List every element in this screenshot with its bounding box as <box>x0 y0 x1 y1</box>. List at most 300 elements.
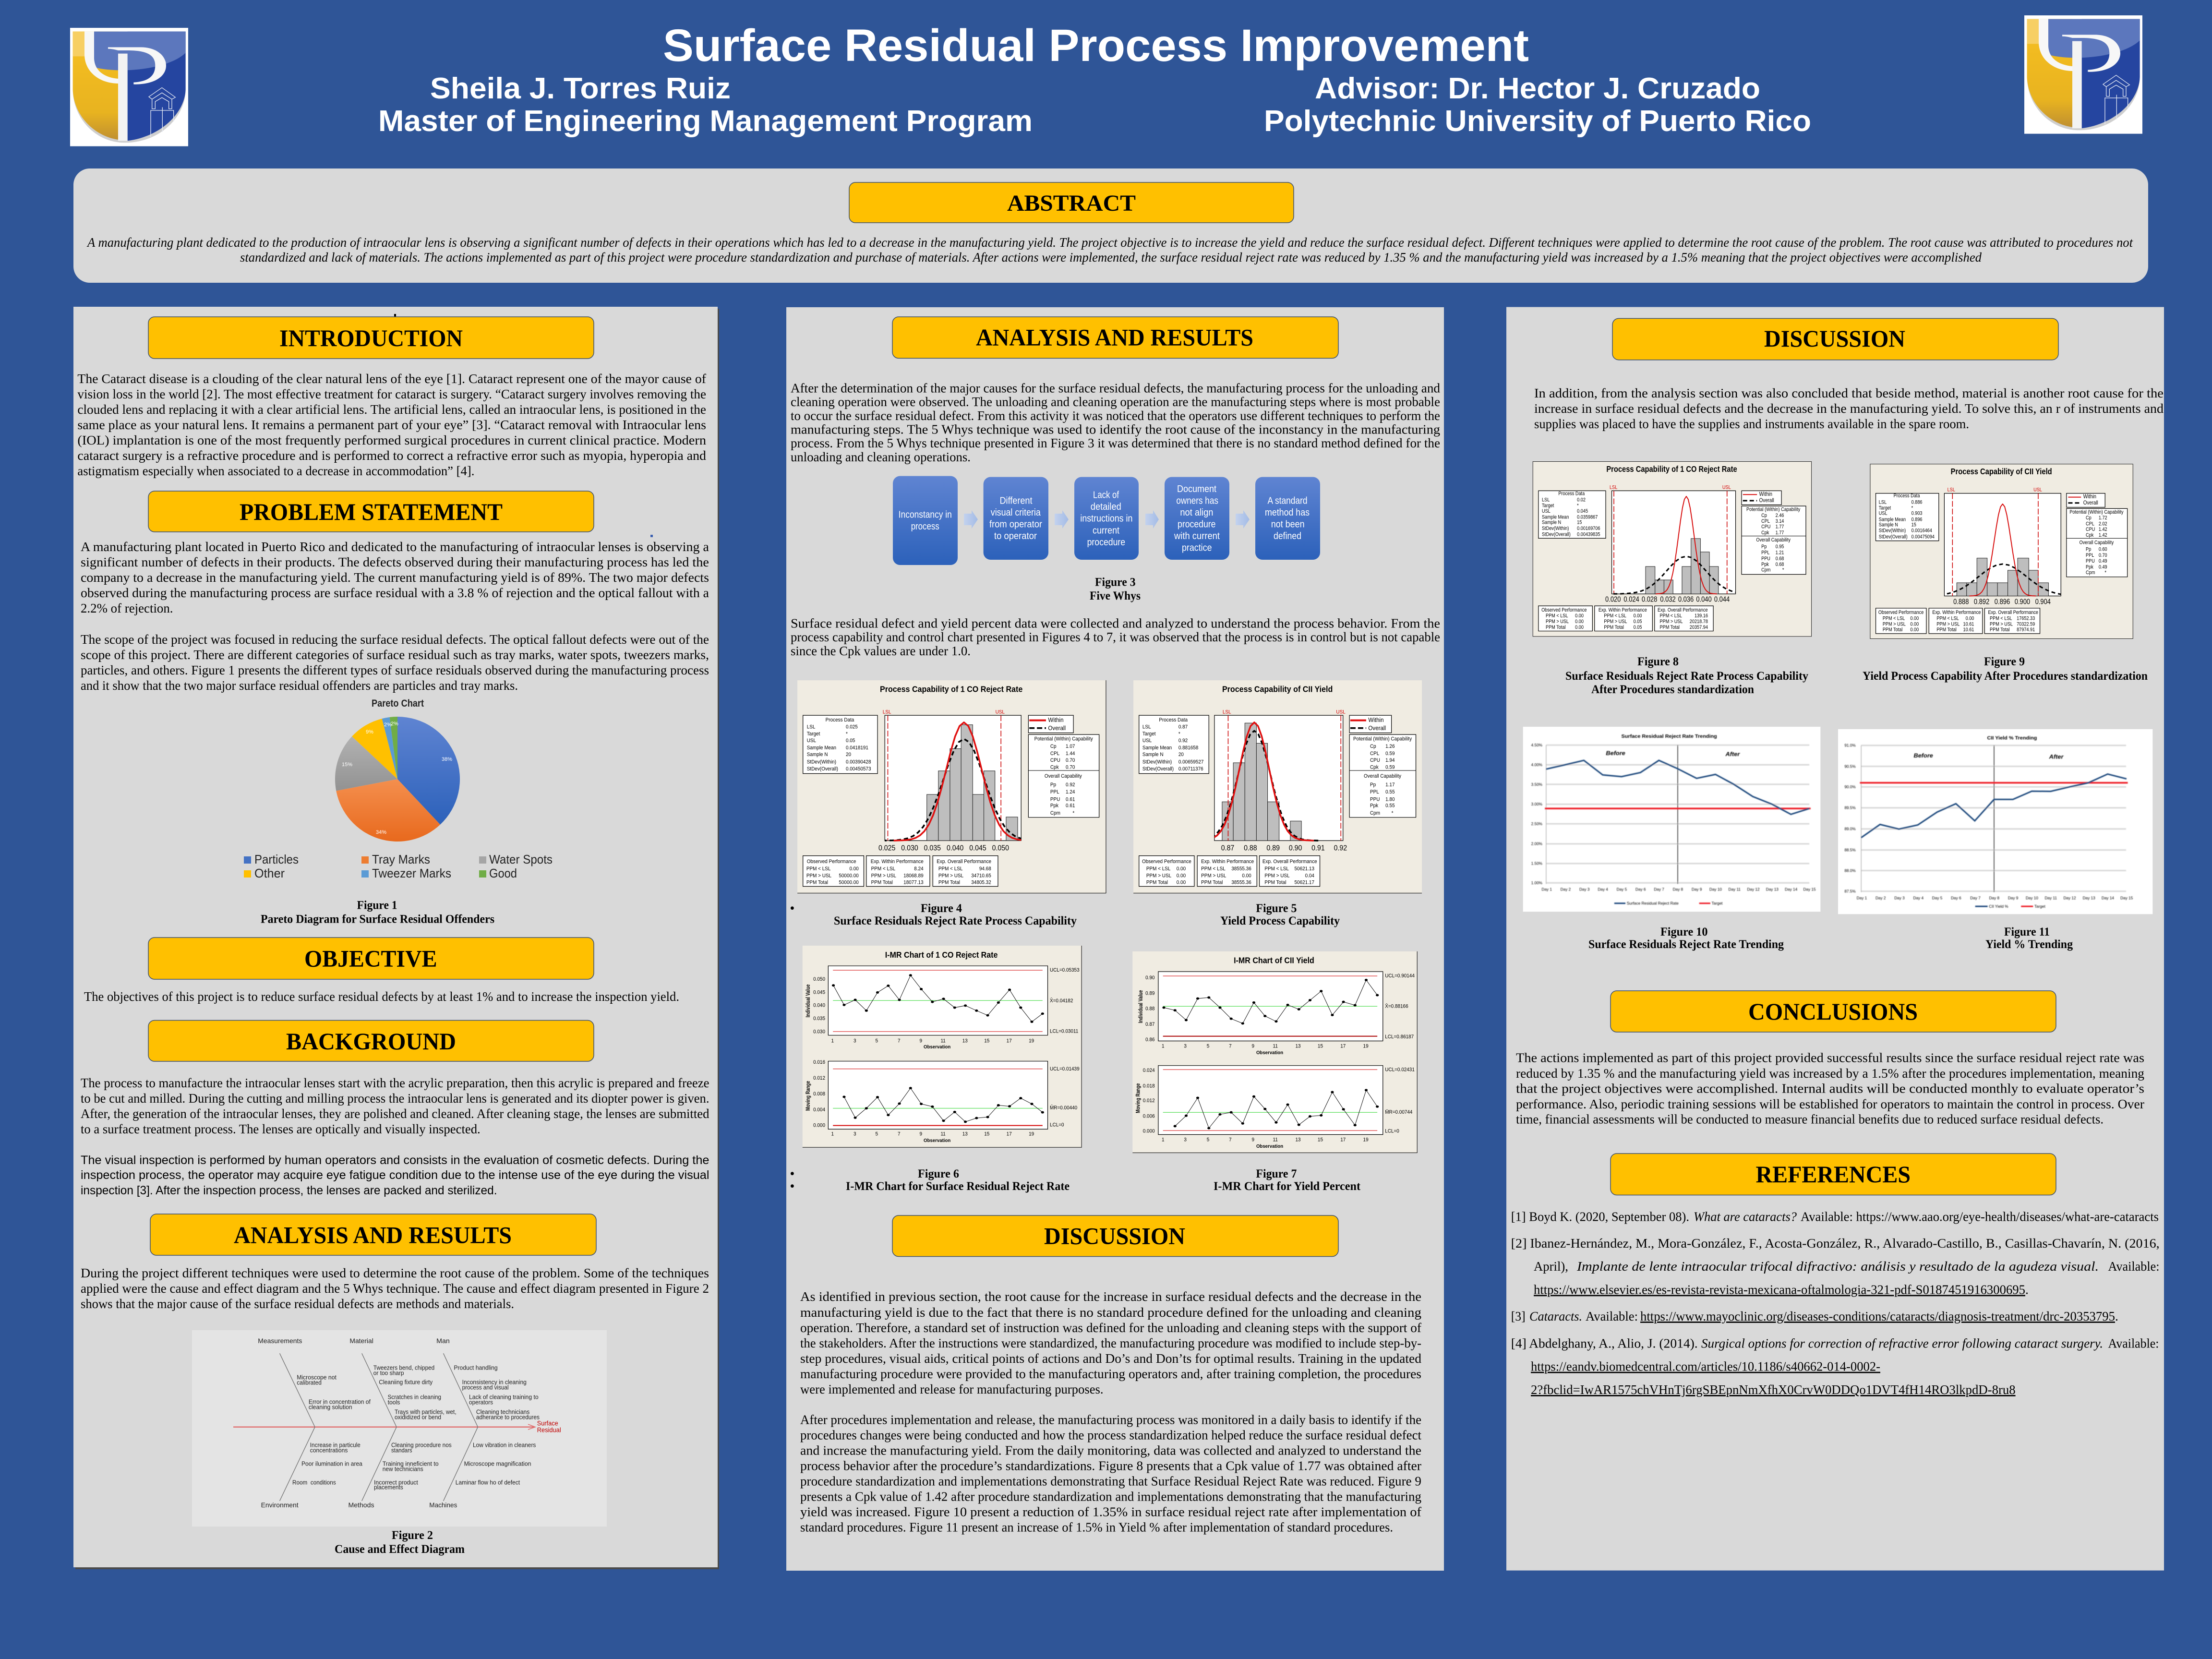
chart: figure 7 I-MR chart: 15 <box>1318 1137 1323 1143</box>
chart: figure 9 process capability: 1.72 <box>2099 516 2107 521</box>
caption: figure 3: Figure 3 <box>1095 576 1136 589</box>
diagram: cause and effect fishbone: Surface <box>537 1419 558 1427</box>
text: discussion: As identified in previous section, the root cause for the increase in surface residual defects and the decrease in the <box>800 1289 1421 1304</box>
text: conclusions <box>1516 1050 2144 1126</box>
step 3 box: current <box>1093 526 1119 536</box>
chart: figure 6 I-MR chart: 19 <box>1029 1131 1034 1137</box>
heading: introduction: INTRODUCTION <box>279 325 463 351</box>
abstract text: standardized and lack of materials. The actions implemented as part of this project were procedure standardization and purchase of materials. After actions were implemented, the surface residual reject rate was reduced by 1.35 % and the manufacturing yield was increased by a 1.5% meaning that the project objectives were accomplished <box>240 250 1982 264</box>
author block <box>378 72 1811 138</box>
pie chart: pareto chart: 2% <box>391 721 398 727</box>
chart: figure 9 process capability <box>1870 464 2133 638</box>
text: objective: The objectives of this project is to reduce surface residual defects by at least 1% and to increase the inspection yield. <box>84 989 679 1004</box>
text: references: Available: https://www.aao.org/eye-health/diseases/what-are-cataracts <box>1801 1209 2159 1224</box>
chart: figure 5 process capability: Sample N <box>1142 752 1164 757</box>
chart: figure 6 I-MR chart: Observation <box>924 1045 950 1050</box>
captions: figures 8 and 9: Yield Process Capability After Procedures standardization <box>1863 670 2148 683</box>
panel: left column <box>73 307 719 1569</box>
text: references: What are cataracts? <box>1694 1209 1797 1224</box>
step 4 box: practice <box>1182 542 1212 553</box>
diagram: cause and effect fishbone: Microscope not <box>297 1374 337 1381</box>
step 2 box: visual criteria <box>991 507 1041 518</box>
chart: figure 8 process capability: 0.040 <box>1696 596 1712 604</box>
step 5 box: A standard <box>1267 495 1308 506</box>
chart: figure 9 process capability: USL <box>1879 511 1887 517</box>
chart: figure 8 process capability: Process Capability of 1 CO Reject Rate <box>1606 465 1737 474</box>
chart: figure 10 reject rate trend: Target <box>1712 902 1723 906</box>
chart: figure 11 yield trend: Target <box>2034 904 2046 909</box>
chart: figure 7 I-MR chart: 11 <box>1273 1044 1278 1049</box>
chart: figure 9 process capability: Potential (Within) Capability <box>2069 509 2123 515</box>
chart: figure 5 process capability: 0.92 <box>1334 844 1347 853</box>
step 2 box: Different <box>999 495 1033 506</box>
chart: figure 11 yield trend: 90.5% <box>1844 764 1856 769</box>
chart: figure 9 process capability: Overall <box>2083 500 2098 506</box>
chart: figure 8 process capability: PPM > USL <box>1604 619 1627 625</box>
chart: figure 7 I-MR chart: 0.90 <box>1145 975 1155 981</box>
chart: figure 6 I-MR chart: 3 <box>854 1131 856 1137</box>
heading: analysis and results (left): ANALYSIS AND RESULTS <box>234 1221 512 1248</box>
chart: figure 6 I-MR chart: Observation <box>924 1138 950 1143</box>
author block: Advisor: Dr. Hector J. Cruzado <box>1315 72 1760 105</box>
text: background: inspection [3]. After the inspection process, the lenses are packed and sterilized. <box>81 1184 497 1197</box>
chart: figure 5 process capability: PPM > USL <box>1264 873 1290 879</box>
chart: figure 7 I-MR chart: 17 <box>1340 1137 1346 1143</box>
diagram: cause and effect fishbone: Cleaniing fixture dirty <box>379 1379 433 1385</box>
chart: figure 4 process capability: USL <box>996 709 1005 715</box>
chart: figure 8 process capability: 0.95 <box>1776 544 1784 550</box>
chart: figure 9 process capability: Ppk <box>2086 565 2094 570</box>
chart: figure 4 process capability: 0.045 <box>969 844 986 853</box>
text: introduction: (IOL) implantation is one of the most frequently performed surgical procedures in current clinical practice. Modern <box>77 433 706 447</box>
text: discussion continued: In addition, from the analysis section was also concluded that beside method, material is another root cause for the <box>1534 385 2164 400</box>
arrow 3 <box>1145 510 1159 529</box>
panel: middle column <box>786 307 1444 1571</box>
chart: figure 10 reject rate trend: 2.00% <box>1531 842 1542 846</box>
chart: figure 5 process capability: 0.59 <box>1385 765 1395 770</box>
chart: figure 5 process capability: 0.00711376 <box>1178 767 1203 772</box>
chart: figure 5 process capability: 50621.17 <box>1295 880 1314 886</box>
chart: figure 4 process capability: 34710.65 <box>971 873 991 879</box>
captions: figures 10 and 11: Yield % Trending <box>1985 938 2073 951</box>
chart: figure 11 yield trend: CII Yield % Trending <box>1987 735 2037 741</box>
text: analysis and results (left): applied were the cause and effect diagram and the 5 Whys technique. The cause and effect diagram presented in Figure 2 <box>81 1281 709 1296</box>
chart: figure 5 process capability: 0.00 <box>1177 880 1186 886</box>
step 3 box: detailed <box>1091 502 1121 512</box>
chart: figure 4 process capability: 34805.32 <box>971 880 991 886</box>
chart: figure 8 process capability <box>1533 461 1812 637</box>
text: problem statement: and it show that the two major surface residual offenders are particles and tray marks. <box>81 678 518 693</box>
chart: figure 5 process capability: StDev(Overall) <box>1142 767 1174 772</box>
chart: figure 4 process capability: PPM Total <box>938 880 960 886</box>
chart: figure 9 process capability: PPM Total <box>1990 627 2010 633</box>
heading: discussion (right) <box>1612 318 2058 360</box>
chart: figure 5 process capability: Sample Mean <box>1142 745 1172 751</box>
chart: figure 10 reject rate trend: 1.00% <box>1531 881 1542 885</box>
captions: figures 4 and 5: • <box>790 902 794 915</box>
chart: figure 5 process capability: PPL <box>1370 790 1379 795</box>
diagram: cause and effect fishbone: tools <box>388 1399 400 1406</box>
text: analysis and results (left): shows that the major cause of the surface residual defects are methods and materials. <box>81 1296 514 1311</box>
chart: figure 9 process capability: 10.61 <box>1963 622 1974 627</box>
text: discussion: and increase the manufacturing yield. From the daily monitoring, data was collected and analyzed to understand the <box>800 1443 1421 1457</box>
captions: figures 10 and 11: Figure 11 <box>2004 926 2050 938</box>
chart: figure 4 process capability: LSL <box>807 724 816 730</box>
chart: figure 6 I-MR chart: 15 <box>984 1038 990 1044</box>
chart: figure 11 yield trend: Day 3 <box>1894 896 1905 900</box>
text: background: inspection process, the operator may acquire eye fatigue condition due to the intense use of the eye during the visual <box>81 1168 709 1182</box>
chart: figure 8 process capability: StDev(Overall) <box>1542 532 1571 538</box>
chart: figure 9 process capability: PPM > USL <box>1936 622 1960 627</box>
chart: figure 5 process capability: 1.17 <box>1385 782 1395 788</box>
chart: figure 11 yield trend: Day 1 <box>1857 896 1867 900</box>
text: references: Available: <box>2108 1336 2159 1351</box>
chart: figure 5 process capability: 50621.13 <box>1295 866 1314 872</box>
text: analysis and results (left) <box>81 1265 709 1311</box>
chart: figure 8 process capability: Sample N <box>1542 520 1561 526</box>
chart: figure 8 process capability: PPM < LSL <box>1546 613 1568 619</box>
diagram: cause and effect fishbone: Incorrect product <box>374 1479 418 1486</box>
chart: figure 7 I-MR chart: M̄R=0.00744 <box>1385 1109 1413 1115</box>
chart: figure 6 I-MR chart: UCL=0.01439 <box>1050 1067 1080 1072</box>
chart: figure 8 process capability: * <box>1782 567 1784 573</box>
chart: figure 4 process capability: PPM < LSL <box>806 866 831 872</box>
captions: figures 6 and 7: • <box>790 1180 794 1193</box>
diagram: cause and effect fishbone: Tweezers bend, chipped <box>373 1364 434 1371</box>
chart: figure 7 I-MR chart: 0.89 <box>1145 991 1155 997</box>
text: references: https://eandv.biomedcentral.com/articles/10.1186/s40662-014-0002- <box>1531 1359 1880 1374</box>
diagram: cause and effect fishbone: Man <box>436 1337 450 1345</box>
heading: analysis and results (left) <box>150 1214 596 1255</box>
chart: figure 5 process capability: LSL <box>1223 709 1231 715</box>
chart: figure 9 process capability: PPM < LSL <box>1883 616 1905 622</box>
chart: figure 9 process capability: 17652.33 <box>2017 616 2035 622</box>
heading: introduction <box>148 317 594 359</box>
diagram: cause and effect fishbone: Material <box>349 1337 373 1345</box>
text: references: Implante de lente intraocular trifocal difractivo: análisis y resultado de la agudeza visual. <box>1576 1259 2099 1274</box>
chart: figure 8 process capability: Overall <box>1759 497 1774 504</box>
chart: figure 7 I-MR chart: 15 <box>1318 1044 1323 1049</box>
diagram: cause and effect fishbone: Product handling <box>454 1364 498 1371</box>
text: analysis intro: to occur the surface residual defect. From this activity it was noticed that the operators use different techniques to perform the <box>791 408 1440 423</box>
text: problem statement: observed during the manufacturing process are surface residual with a 3.8 % of rejection and the optical fallout with a <box>81 585 709 600</box>
chart: figure 6 I-MR chart: 0.030 <box>813 1029 825 1034</box>
chart: figure 8 process capability: 0.02 <box>1577 497 1586 503</box>
chart: figure 4 process capability: 0.61 <box>1066 797 1075 802</box>
heading: analysis and results (middle): ANALYSIS AND RESULTS <box>976 324 1253 350</box>
heading: analysis and results (middle) <box>892 317 1338 358</box>
heading: problem statement: PROBLEM STATEMENT <box>240 498 503 525</box>
caption: figure 1 <box>261 899 494 926</box>
step 5 box: defined <box>1274 531 1301 541</box>
chart: figure 10 reject rate trend: 4.00% <box>1531 763 1542 767</box>
chart: figure 8 process capability: 0.00 <box>1575 619 1584 625</box>
chart: figure 8 process capability: Potential (Within) Capability <box>1746 507 1800 513</box>
chart: figure 4 process capability: LSL <box>883 709 891 715</box>
arrow 4 <box>1236 510 1250 529</box>
chart: figure 5 process capability: 0.90 <box>1289 844 1302 853</box>
chart: figure 7 I-MR chart: Moving Range <box>1136 1083 1142 1113</box>
text: references: https://www.mayoclinic.org/diseases-conditions/cataracts/diagnosis-treatment/drc-20353795 <box>1640 1309 2115 1323</box>
chart: figure 9 process capability: LSL <box>1879 500 1887 505</box>
chart: figure 5 process capability: 0.89 <box>1266 844 1280 853</box>
captions: figures 6 and 7: I-MR Chart for Yield Percent <box>1214 1180 1361 1193</box>
chart: figure 8 process capability: 0.00169706 <box>1577 526 1600 531</box>
chart: figure 9 process capability: 0.888 <box>1953 598 1969 606</box>
text: conclusions: that the project objectives were accomplished. Internal audits will be conducted monthly to evaluate operator’s <box>1516 1081 2144 1095</box>
heading: background: BACKGROUND <box>286 1028 456 1055</box>
text: problem statement: particles, and others. Figure 1 presents the different types of surface residuals observed during the manufacturing process <box>81 662 709 677</box>
chart: figure 5 process capability: Cpk <box>1370 765 1379 770</box>
chart: figure 7 I-MR chart: 7 <box>1229 1137 1232 1143</box>
chart: figure 8 process capability: Within <box>1759 491 1772 497</box>
chart: figure 4 process capability: Cpm <box>1050 811 1060 816</box>
chart: figure 6 I-MR chart: Moving Range <box>805 1081 811 1111</box>
chart: figure 9 process capability: 0.892 <box>1974 598 1989 606</box>
chart: figure 5 process capability: 0.00 <box>1242 873 1251 879</box>
chart: figure 4 process capability: Cp <box>1050 744 1057 749</box>
chart: figure 8 process capability: 0.05 <box>1634 619 1642 625</box>
chart: figure 7 I-MR chart: 0.000 <box>1143 1129 1155 1134</box>
chart: figure 9 process capability: Sample N <box>1879 522 1898 528</box>
text: background: The visual inspection is performed by human operators and consists in the evaluation of cosmetic defects. During the <box>81 1154 709 1167</box>
chart: figure 11 yield trend: Day 12 <box>2063 896 2076 900</box>
title: Surface Residual Process Improvement <box>663 20 1529 71</box>
text: references: [3] <box>1511 1309 1526 1323</box>
text: analysis intro: process. From the 5 Whys technique presented in Figure 3 it was determined that there is no standard method defined for the <box>791 435 1440 450</box>
chart: figure 4 process capability: 0.030 <box>901 844 918 853</box>
diagram: cause and effect fishbone: Poor ilumination in area <box>301 1460 362 1467</box>
chart: figure 10 reject rate trend: Day 11 <box>1728 888 1741 892</box>
step 2 box: to operator <box>994 531 1037 541</box>
text: discussion: were implemented and release for manufacturing purposes. <box>800 1382 1104 1396</box>
captions: figures 8 and 9: Surface Residuals Reject Rate Process Capability <box>1565 670 1808 683</box>
panel: abstract <box>73 168 2148 283</box>
pie chart legend: Water Spots <box>489 852 553 866</box>
chart: figure 4 process capability: CPU <box>1050 758 1060 763</box>
chart: figure 5 process capability: 20 <box>1178 752 1184 757</box>
chart: figure 7 I-MR chart: 0.86 <box>1145 1037 1155 1043</box>
chart: figure 5 process capability: 0.55 <box>1385 790 1395 795</box>
text: discussion: procedure standardization and implementations demonstrating that Surface Residual Reject Rate was reduced. Figure 9 <box>800 1474 1421 1488</box>
chart: figure 8 process capability: PPM > USL <box>1660 619 1683 625</box>
chart: figure 5 process capability: 0.92 <box>1178 738 1188 744</box>
chart: figure 6 I-MR chart: 7 <box>898 1131 901 1137</box>
chart: figure 5 process capability: 0.91 <box>1311 844 1325 853</box>
chart: figure 5 process capability: Cpm <box>1370 811 1380 816</box>
chart: figure 9 process capability: LSL <box>1948 487 1955 493</box>
chart: figure 10 reject rate trend: 3.50% <box>1531 782 1542 787</box>
chart: figure 9 process capability: USL <box>2033 487 2042 493</box>
chart: figure 4 process capability: PPU <box>1050 797 1060 802</box>
diagram: cause and effect fishbone: cleaning solution <box>309 1404 352 1410</box>
chart: figure 6 I-MR chart: 19 <box>1029 1038 1034 1044</box>
abstract text <box>86 235 2133 264</box>
chart: figure 4 process capability <box>797 680 1106 893</box>
text: problem statement: company to a decrease in the manufacturing yield. The current manufacturing yield is of 89%. The two major defects <box>81 570 709 585</box>
chart: figure 5 process capability: USL <box>1336 709 1346 715</box>
chart: figure 9 process capability: 70322.59 <box>2017 622 2035 627</box>
chart: figure 4 process capability: PPM < LSL <box>871 866 895 872</box>
chart: figure 9 process capability: 87974.91 <box>2017 627 2035 633</box>
heading: abstract: ABSTRACT <box>1007 191 1136 216</box>
text: references: https://www.elsevier.es/es-revista-revista-mexicana-oftalmologia-321-pdf-S0187451916300695 <box>1534 1282 2025 1297</box>
chart: figure 4 process capability: PPM > USL <box>871 873 896 879</box>
text: discussion: process behavior after the procedure’s standardizations. Figure 8 presents that a Cpk value of 1.77 was obtained after <box>800 1458 1421 1473</box>
chart: figure 9 process capability: 0.00 <box>1910 616 1919 622</box>
chart: figure 8 process capability: CPU <box>1761 524 1770 530</box>
chart: figure 8 process capability: PPU <box>1761 556 1770 562</box>
chart: figure 8 process capability: Pp <box>1761 544 1767 550</box>
text: introduction <box>77 371 707 478</box>
chart: figure 6 I-MR chart: 0.050 <box>813 977 825 982</box>
chart: figure 7 I-MR chart: 0.018 <box>1143 1083 1155 1089</box>
chart: figure 7 I-MR chart: 19 <box>1363 1137 1369 1143</box>
chart: figure 6 I-MR chart: LCL=0 <box>1050 1122 1064 1128</box>
chart: figure 4 process capability: 0.025 <box>878 844 895 853</box>
chart: figure 8 process capability: Exp. Overall Performance <box>1658 607 1708 613</box>
heading: objective <box>148 938 594 979</box>
step 2 box <box>984 477 1048 560</box>
chart: figure 4 process capability: 50000.00 <box>839 880 859 886</box>
abstract text: A manufacturing plant dedicated to the production of intraocular lens is observing a significant number of defects in their operations which has led to a decrease in the manufacturing yield. The project objective is to increase the yield and reduce the surface residual defect. Different techniques were applied to determine the root cause of the problem. The root cause was attributed to procedures not <box>86 235 2133 250</box>
text: analysis intro <box>791 380 1440 464</box>
diagram: cause and effect fishbone: adherance to procedures <box>476 1414 540 1420</box>
chart: figure 5 process capability: Exp. Within Performance <box>1201 859 1254 865</box>
author block: Polytechnic University of Puerto Rico <box>1264 105 1811 138</box>
text: problem statement: A manufacturing plant located in Puerto Rico and dedicated to the manufacturing of intraocular lenses is observing a <box>81 539 709 554</box>
captions: figures 6 and 7: Figure 6 <box>918 1167 959 1180</box>
step 2 box: from operator <box>989 519 1042 530</box>
chart: figure 8 process capability: Cpm <box>1761 567 1770 573</box>
chart: figure 6 I-MR chart: 13 <box>962 1038 968 1044</box>
chart: figure 5 process capability: Overall <box>1368 725 1386 732</box>
chart: figure 11 yield trend: After <box>2049 754 2064 760</box>
text: discussion: operation. Therefore, a standard set of instruction was defined for the unloading and cleaning steps with the support of <box>800 1320 1422 1335</box>
chart: figure 9 process capability: 0.0016464 <box>1911 528 1932 534</box>
chart: figure 8 process capability: PPL <box>1761 550 1770 556</box>
text: discussion continued: increase in surface residual defects and the decrease in the manufacturing yield. To solve this, an r of instruments and <box>1534 401 2164 416</box>
chart: figure 5 process capability: 0.88 <box>1244 844 1257 853</box>
chart: figure 8 process capability: PPM Total <box>1604 625 1624 630</box>
pie chart legend: Tray Marks <box>372 852 430 866</box>
chart: figure 7 I-MR chart: 5 <box>1207 1137 1209 1143</box>
chart: figure 7 I-MR chart: 0.87 <box>1145 1022 1155 1027</box>
chart: figure 4 process capability: 0.70 <box>1066 758 1075 763</box>
chart: figure 8 process capability: 0.032 <box>1660 596 1676 604</box>
text: background <box>81 1075 709 1197</box>
chart: figure 9 process capability: PPL <box>2086 553 2094 558</box>
chart: figure 11 yield trend: Day 2 <box>1875 896 1886 900</box>
chart: figure 9 process capability: StDev(Within) <box>1879 528 1906 534</box>
chart: figure 8 process capability: LSL <box>1542 497 1550 503</box>
chart: figure 11 yield trend: 90.0% <box>1844 785 1856 789</box>
text: conclusions: performance. Also, periodic training sessions will be established for operators to maintain the control in process. Over <box>1516 1096 2144 1111</box>
chart: figure 10 reject rate trend: After <box>1725 751 1740 757</box>
chart: figure 4 process capability: Process Data <box>826 717 854 723</box>
caption: figure 1: Figure 1 <box>357 899 397 912</box>
chart: figure 8 process capability: USL <box>1722 485 1731 491</box>
chart: figure 4 process capability: PPM Total <box>871 880 893 886</box>
step 3 box <box>1074 477 1139 560</box>
chart: figure 6 I-MR chart: 5 <box>876 1038 878 1044</box>
chart: figure 11 yield trend: Before <box>1914 752 1933 759</box>
chart: figure 4 process capability: 1.44 <box>1066 751 1075 757</box>
caption: figure 2: Figure 2 <box>392 1529 433 1542</box>
diagram: cause and effect fishbone: Inconsistency in cleaning <box>462 1379 527 1385</box>
chart: figure 4 process capability: 8.24 <box>914 866 924 872</box>
text: background: After, the generation of the intraocular lenses, they are polished and cleaned. After cleaning stage, the lenses are submitted <box>81 1106 709 1121</box>
chart: figure 6 I-MR chart: 0.004 <box>813 1107 825 1113</box>
text: background: to be cut and milled. During the cutting and milling process the intraocular lens is generated and its diopter power is given. <box>81 1091 709 1106</box>
chart: figure 7 I-MR chart: 0.024 <box>1143 1068 1155 1073</box>
chart: figure 9 process capability: * <box>1911 505 1913 511</box>
chart: figure 9 process capability: Exp. Overall Performance <box>1988 610 2038 615</box>
chart: figure 5 process capability <box>1133 680 1422 893</box>
chart: figure 8 process capability: 0.0359867 <box>1577 515 1598 520</box>
chart: figure 8 process capability: 15 <box>1577 520 1582 526</box>
chart: figure 10 reject rate trend: Day 8 <box>1673 888 1683 892</box>
chart: figure 4 process capability: Sample N <box>807 752 828 757</box>
chart: figure 4 process capability: * <box>846 732 848 737</box>
chart: figure 4 process capability: Potential (Within) Capability <box>1034 736 1094 742</box>
chart: figure 5 process capability: CPL <box>1370 751 1380 757</box>
chart: figure 4 process capability: 50000.00 <box>839 873 859 879</box>
chart: figure 6 I-MR chart: X̄=0.04182 <box>1050 998 1073 1004</box>
chart: figure 9 process capability: 0.896 <box>1995 598 2010 606</box>
chart: figure 11 yield trend: CII Yield % <box>1989 904 2008 909</box>
chart: figure 11 yield trend: 88.5% <box>1844 848 1856 852</box>
diagram: cause and effect fishbone: Machines <box>429 1501 457 1509</box>
chart: figure 7 I-MR chart: 13 <box>1295 1044 1301 1049</box>
chart: figure 10 reject rate trend: Day 2 <box>1561 888 1571 892</box>
text: references: [2] Ibanez-Hernández, M., Mora-González, F., Acosta-González, R., Alvarado-Castillo, B., Casillas-Chavarín, N. (2016, <box>1511 1236 2160 1250</box>
captions: figures 6 and 7: I-MR Chart for Surface Residual Reject Rate <box>846 1180 1070 1193</box>
chart: figure 8 process capability: 0.00 <box>1575 613 1584 619</box>
heading: references <box>1611 1154 2056 1195</box>
chart: figure 5 process capability: Ppk <box>1370 803 1379 809</box>
chart: figure 5 process capability: Cp <box>1370 744 1376 749</box>
diagram: cause and effect fishbone: Lack of cleaning training to <box>469 1394 539 1400</box>
caption: figure 2: Cause and Effect Diagram <box>335 1543 465 1556</box>
text: problem statement <box>81 539 709 693</box>
chart: figure 8 process capability: Overall Capability <box>1756 538 1791 543</box>
chart: figure 10 reject rate trend: Day 9 <box>1692 888 1702 892</box>
chart: figure 5 process capability: Exp. Overall Performance <box>1262 859 1317 865</box>
text: introduction: cataract surgery is a refractive procedure and is performed to correct a refractive error such as myopia, hyperopia and <box>77 448 706 463</box>
chart: figure 6 I-MR chart: 13 <box>962 1131 968 1137</box>
chart: figure 7 I-MR chart: 3 <box>1184 1044 1187 1049</box>
chart: figure 4 process capability: Overall <box>1048 725 1066 732</box>
chart: figure 5 process capability: CPU <box>1370 758 1380 763</box>
chart: figure 9 process capability: Observed Performance <box>1878 610 1924 615</box>
diagram: cause and effect fishbone: Low vibration in cleaners <box>473 1442 536 1448</box>
chart: figure 4 process capability: 0.00390428 <box>846 759 871 765</box>
chart: figure 6 I-MR chart: 3 <box>854 1038 856 1044</box>
chart: figure 6 I-MR chart: 0.035 <box>813 1016 825 1022</box>
chart: figure 4 process capability: Overall Capability <box>1045 774 1082 779</box>
pie chart legend: Good <box>489 866 517 880</box>
chart: figure 8 process capability: 0.020 <box>1605 596 1621 604</box>
chart: figure 9 process capability: CPL <box>2086 521 2094 527</box>
chart: figure 5 process capability: 38555.36 <box>1231 866 1251 872</box>
chart: figure 8 process capability: * <box>1577 503 1579 509</box>
chart: figure 9 process capability: 0.00 <box>1910 622 1919 627</box>
chart: figure 7 I-MR chart: LCL=0 <box>1385 1129 1399 1134</box>
step 1 box: process <box>911 521 939 532</box>
chart: figure 5 process capability: * <box>1178 732 1180 737</box>
chart: figure 8 process capability: 1.77 <box>1776 530 1784 536</box>
